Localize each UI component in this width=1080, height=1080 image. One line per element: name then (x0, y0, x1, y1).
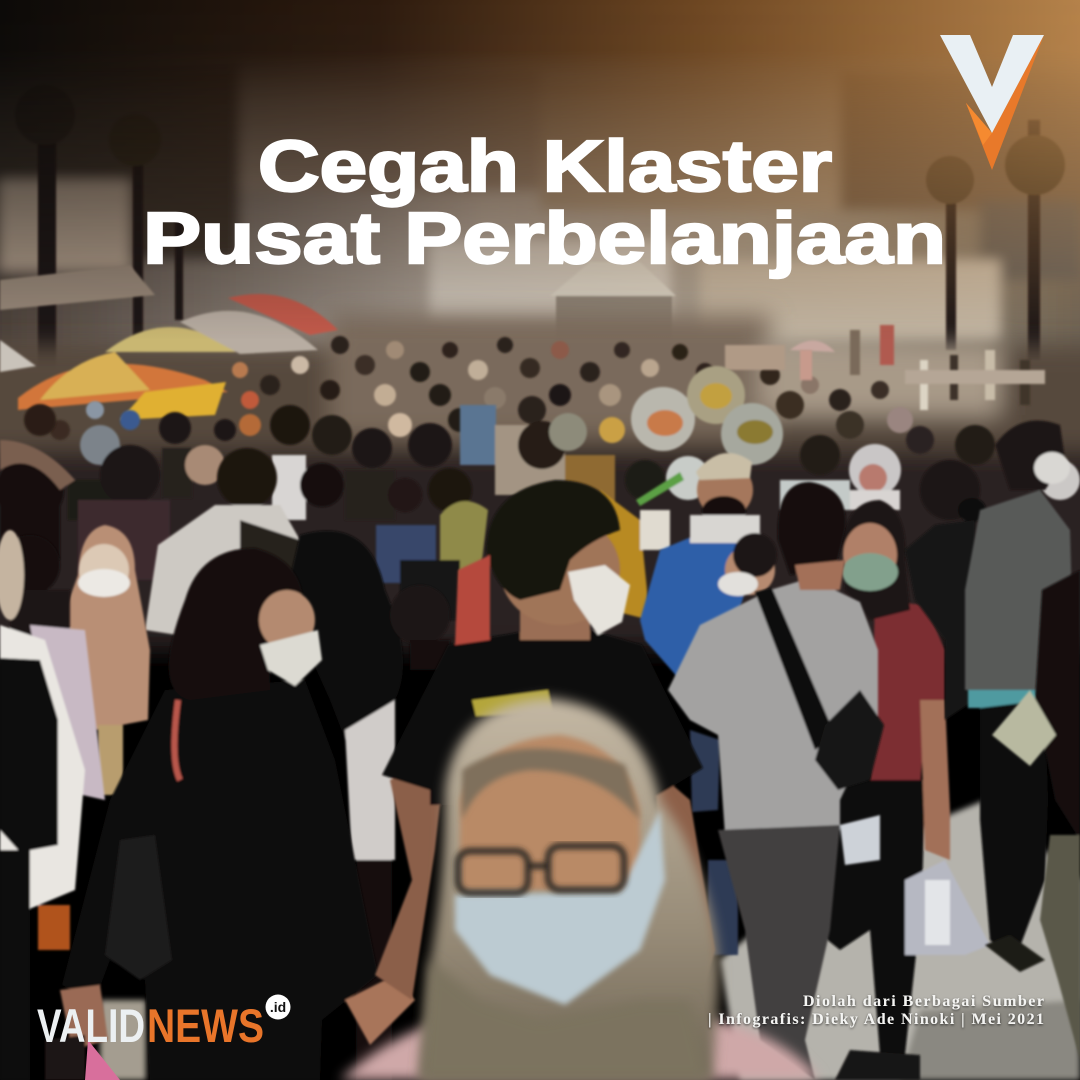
logo: validnews.id: .id (270, 999, 286, 1015)
dark haired woman (285, 531, 450, 1080)
left hijab woman (60, 525, 150, 795)
street backdrop (0, 0, 1080, 420)
right man in grey jacket (965, 420, 1072, 972)
umbrellas (0, 265, 835, 420)
wordmark NEWS: NEWS (147, 999, 264, 1052)
white shirt man (145, 448, 300, 640)
title line 1: Cegah Klaster (258, 127, 832, 207)
man in grey sweatshirt (668, 482, 884, 1080)
foreground woman in hijab (340, 698, 820, 1080)
logo: V mark (940, 35, 1044, 170)
credit line 1: Diolah dari Berbagai Sumber (803, 993, 1044, 1010)
man in black t-shirt (375, 480, 715, 1000)
balloons (631, 366, 783, 506)
cobblestone ground (100, 800, 1080, 1080)
distant crowd (0, 315, 1080, 650)
crowd heads and bodies (0, 345, 1080, 620)
woman in red shirt (815, 500, 990, 1080)
street lamps (15, 85, 1065, 370)
source credit (708, 993, 1044, 1028)
woman in black dress (45, 548, 415, 1080)
credit line 2: | Infografis: Dieky Ade Ninoki | Mei 2021 (708, 1011, 1044, 1028)
market tent (550, 262, 676, 340)
bottom-left pink bag (85, 1040, 120, 1080)
small distant people (50, 325, 1030, 441)
id badge (266, 994, 290, 1020)
blue jacket man with cap (640, 453, 777, 955)
top gradient overlay (0, 0, 1080, 340)
left edge figures (0, 530, 105, 1080)
wordmark VALID: VALID (37, 999, 145, 1052)
right edge figure (992, 570, 1080, 1060)
logo: validnews.id (37, 994, 290, 1052)
black hoodie man (905, 460, 986, 720)
title line 2: Pusat Perbelanjaan (143, 199, 946, 279)
title (143, 127, 946, 279)
